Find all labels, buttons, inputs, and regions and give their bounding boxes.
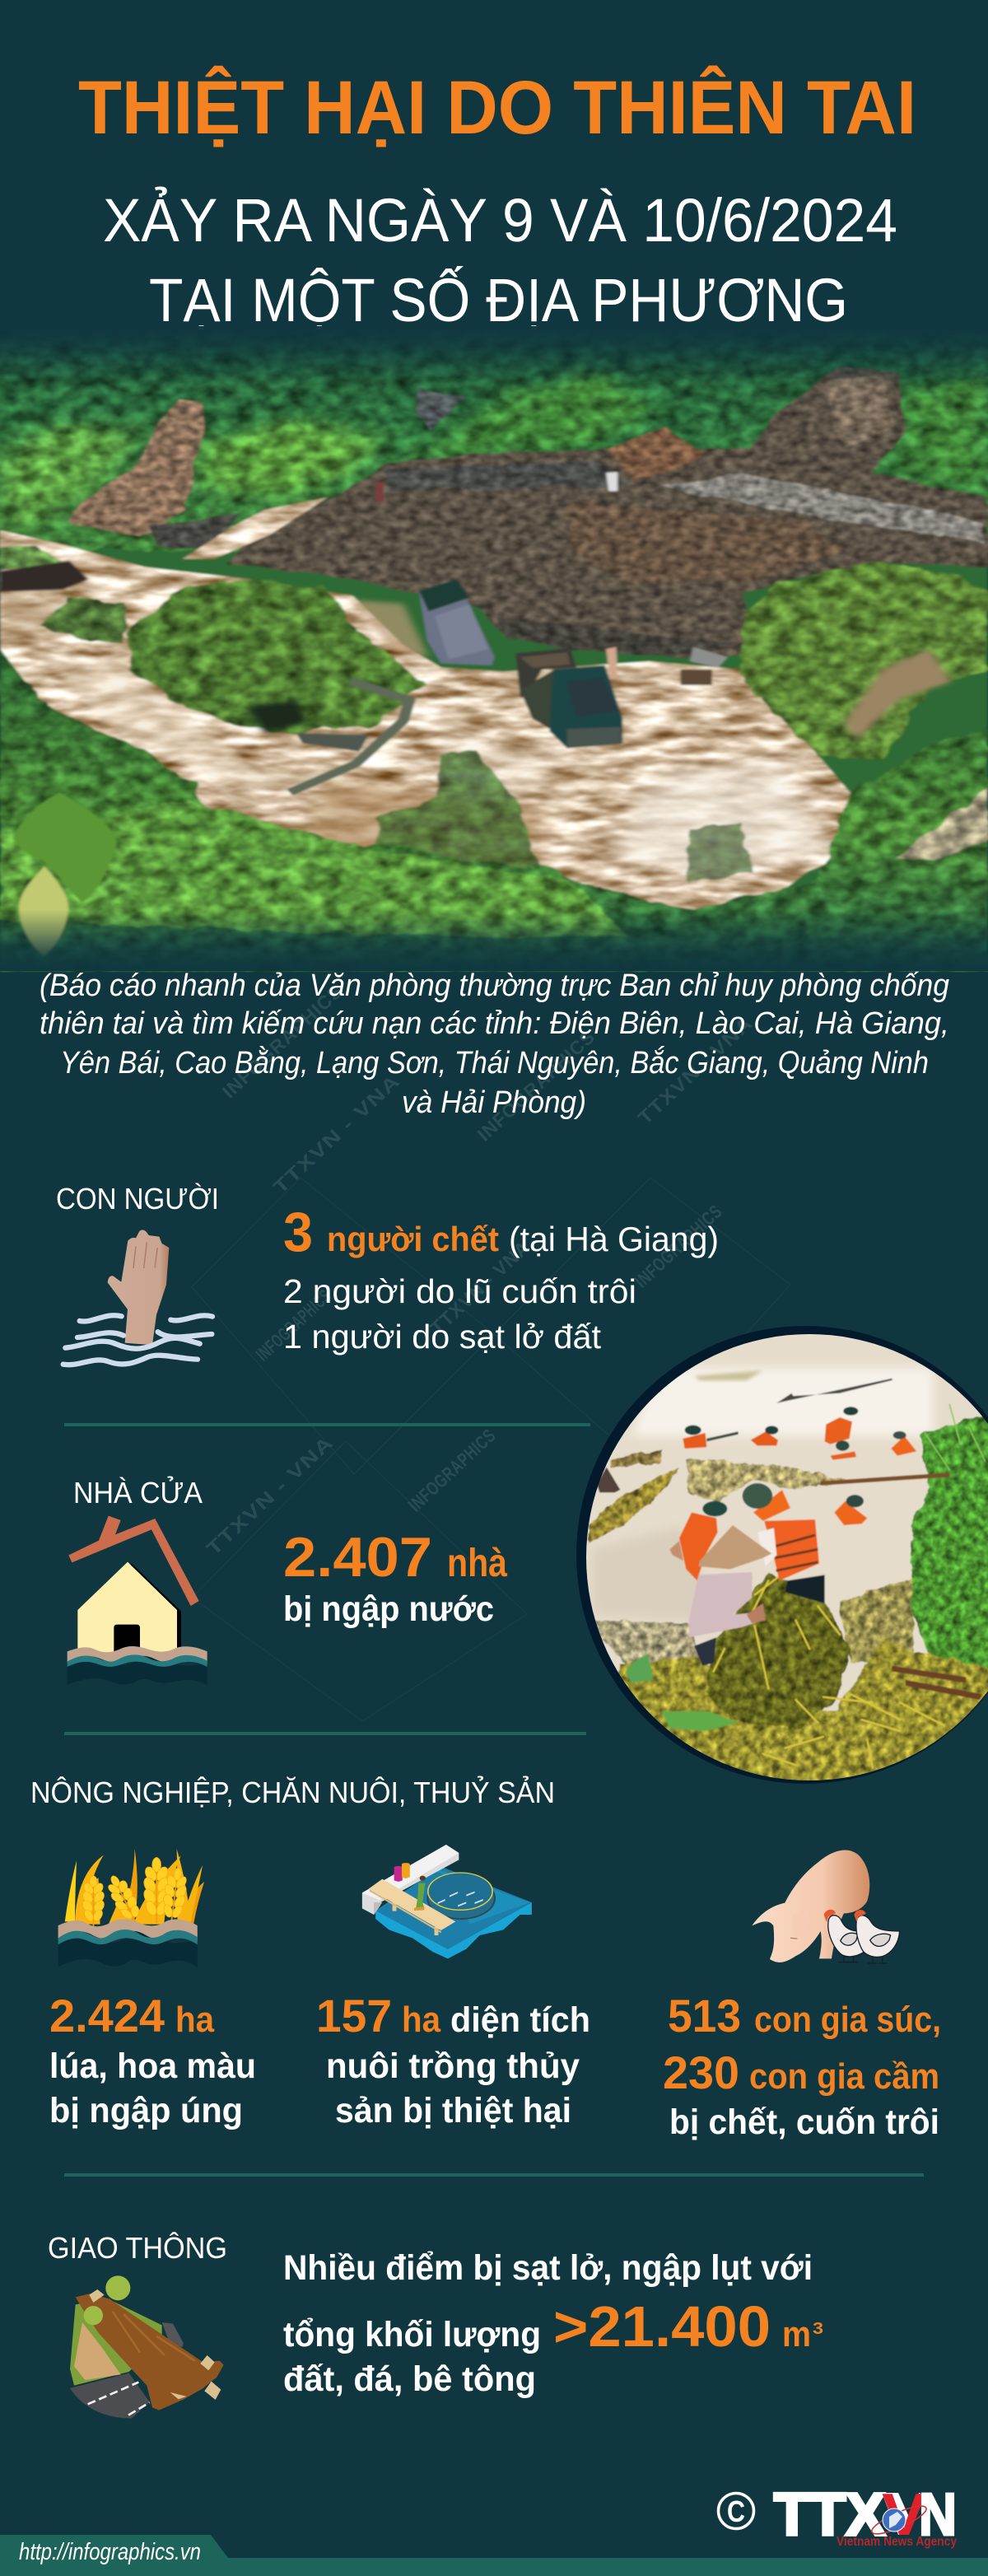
logo: TTXVN: TTX: [774, 2482, 885, 2548]
watermarks: TTXVN - VNA: [269, 1070, 404, 1198]
watermarks: TTXVN - VNA: [203, 1431, 338, 1560]
photo: rescuers harvesting rice: [576, 1326, 988, 1811]
subtitle: XẢY RA NGÀY 9 VÀ 10/6/2024: [103, 186, 897, 254]
stat: người chết: 3: [283, 1201, 313, 1263]
watermarks: INFOGRAPHICS: [252, 1285, 336, 1365]
stat: gia súc, gia cầm: con gia súc,: [754, 2000, 941, 2040]
source note: [40, 968, 949, 1120]
icon: drowning hand: [63, 1230, 212, 1365]
stat: gia súc, gia cầm: 513: [668, 1990, 741, 2042]
stat: gia súc, gia cầm: [663, 1990, 941, 2142]
heading: nhà cửa: NHÀ CỬA: [73, 1475, 203, 1510]
stat: thủy sản: nuôi trồng thủy: [326, 2046, 580, 2086]
stat: thủy sản: ha: [402, 2000, 440, 2040]
source note: thiên tai và tìm kiếm cứu nạn các tỉnh: Điện Biên, Lào Cai, Hà Giang,: [40, 1006, 949, 1041]
stat: nhà bị ngập: bị ngập nước: [283, 1589, 494, 1629]
stat: người chết: 1 người do sạt lở đất: [283, 1318, 602, 1356]
watermarks: INFOGRAPHICS: [404, 1425, 500, 1516]
watermarks: [192, 980, 790, 1721]
icon: flooded wheat: [58, 1849, 204, 1967]
heading: con người: CON NGƯỜI: [56, 1182, 219, 1216]
heading: giao thông: GIAO THÔNG: [48, 2231, 227, 2265]
watermarks: TTXVN - VNA: [426, 1236, 534, 1339]
stat: nhà bị ngập: [283, 1526, 507, 1629]
logo: TTXVN: [718, 2482, 957, 2549]
stat: lúa, hoa màu: [49, 1990, 256, 2130]
stat: lúa, hoa màu: bị ngập úng: [49, 2091, 243, 2130]
stat: lúa, hoa màu: lúa, hoa màu: [49, 2046, 256, 2086]
stat: khối lượng đất đá: đất, đá, bê tông: [283, 2359, 536, 2399]
stat: lúa, hoa màu: 2.424: [49, 1990, 165, 2042]
title: THIỆT HẠI DO THIÊN TAI: [78, 64, 916, 150]
stat: thủy sản: 157: [316, 1990, 392, 2042]
icon: flooded house: [68, 1516, 207, 1685]
logo: TTXVN: C: [727, 2494, 745, 2528]
stat: lúa, hoa màu: ha: [175, 2000, 214, 2040]
icon: fish farm: [362, 1845, 532, 1958]
stat: khối lượng đất đá: [283, 2248, 823, 2399]
stat: gia súc, gia cầm: con gia cầm: [749, 2056, 939, 2097]
footer band with url: http://infographics.vn: [19, 2539, 201, 2565]
watermarks: INFOGRAPHICS: [473, 1025, 599, 1146]
subtitle: TẠI MỘT SỐ ĐỊA PHƯƠNG: [149, 266, 848, 334]
subtitle: [103, 186, 897, 334]
photo: flooded road with vehicles: [0, 321, 988, 972]
watermarks: INFOGRAPHICS: [218, 980, 347, 1103]
stat: người chết: người chết: [327, 1220, 499, 1258]
watermarks: TTXVN - VNA: [634, 1012, 757, 1129]
stat: thủy sản: diện tích: [450, 2000, 590, 2040]
watermarks: INFOGRAPHICS: [631, 1201, 726, 1292]
stat: khối lượng đất đá: tổng khối lượng: [283, 2315, 541, 2354]
icon: pig and chickens: [752, 1850, 900, 1963]
stat: thủy sản: [316, 1990, 590, 2130]
logo: TTXVN: Vietnam News Agency: [837, 2535, 957, 2549]
logo: TTXVN: V: [882, 2482, 926, 2548]
stat: gia súc, gia cầm: bị chết, cuốn trôi: [669, 2102, 939, 2142]
stat: nhà bị ngập: 2.407: [283, 1526, 432, 1589]
stat: người chết: 2 người do lũ cuốn trôi: [283, 1272, 636, 1310]
stat: gia súc, gia cầm: 230: [663, 2046, 739, 2098]
stat: nhà bị ngập: nhà: [447, 1542, 507, 1585]
footer band with url: [0, 2535, 988, 2576]
icon: landslide on road: [70, 2275, 224, 2419]
stat: khối lượng đất đá: 3: [813, 2320, 823, 2338]
stat: khối lượng đất đá: m: [782, 2314, 811, 2354]
source note: (Báo cáo nhanh của Văn phòng thường trực Ban chỉ huy phòng chống: [40, 968, 949, 1003]
source note: và Hải Phòng): [402, 1085, 586, 1120]
stat: người chết: [283, 1201, 719, 1356]
stat: khối lượng đất đá: Nhiều điểm bị sạt lở, ngập lụt với: [283, 2248, 813, 2288]
stat: khối lượng đất đá: >21.400: [553, 2294, 771, 2359]
heading: nông nghiệp: NÔNG NGHIỆP, CHĂN NUÔI, THUỶ SẢN: [30, 1776, 555, 1809]
stat: thủy sản: sản bị thiệt hại: [335, 2091, 571, 2130]
logo: TTXVN: N: [919, 2482, 957, 2548]
stat: người chết: (tại Hà Giang): [509, 1220, 719, 1258]
